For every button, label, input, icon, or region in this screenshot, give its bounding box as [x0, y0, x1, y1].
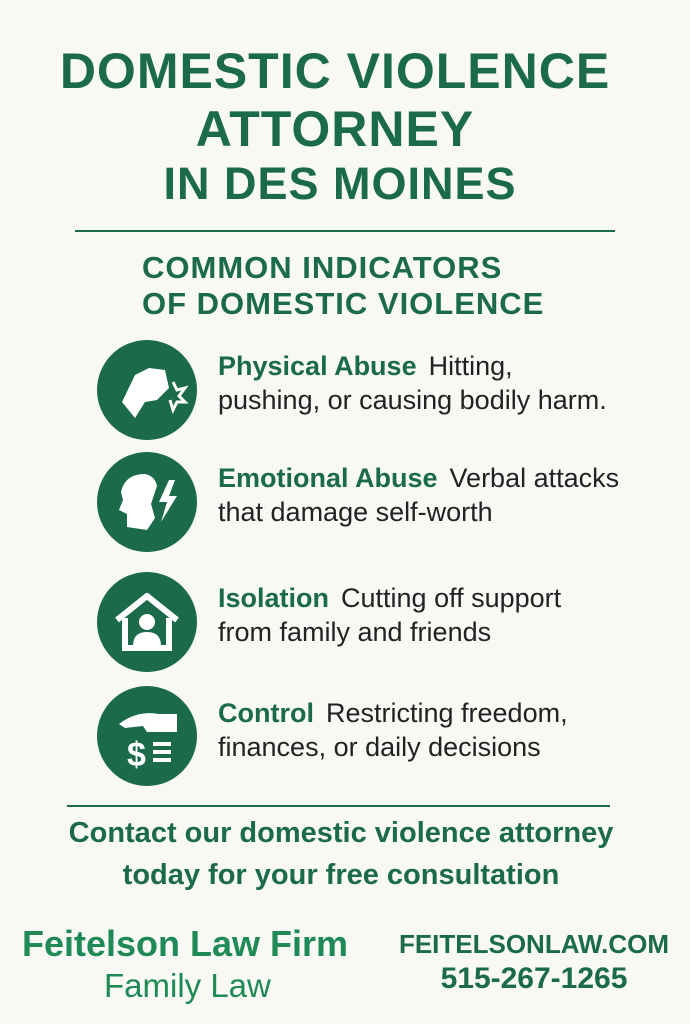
icon: hand and money: $: [127, 736, 146, 774]
text: Family Law: [104, 967, 271, 1004]
footer: contact info: FEITELSONLAW.COM: [399, 929, 669, 959]
text: emotional abuse: that damage self-worth: [218, 497, 493, 527]
call to action: [69, 817, 614, 891]
text: isolation: from family and friends: [218, 617, 491, 647]
footer: contact info: 515-267-1265: [441, 962, 627, 995]
title: DOMESTIC VIOLENCE: [60, 43, 610, 99]
title: ATTORNEY: [196, 101, 474, 157]
title: [60, 43, 610, 157]
subtitle: location: IN DES MOINES: [163, 158, 517, 209]
section heading: COMMON INDICATORS: [142, 250, 502, 285]
text: isolation: Isolation Cutting off support: [218, 583, 561, 613]
section heading: [142, 250, 544, 321]
call to action: Contact our domestic violence attorney: [69, 817, 613, 849]
text: isolation: [218, 583, 561, 647]
text: control: [218, 698, 568, 762]
icon: head with lightning: [97, 452, 197, 552]
icon: fist: [97, 340, 197, 440]
text: emotional abuse: Emotional Abuse Verbal attacks: [218, 463, 619, 493]
text: physical abuse: [218, 351, 607, 415]
text: physical abuse: pushing, or causing bodily harm.: [218, 385, 607, 415]
text: control: Control Restricting freedom,: [218, 698, 568, 728]
text: control: finances, or daily decisions: [218, 732, 541, 762]
text: physical abuse: Physical Abuse Hitting,: [218, 351, 513, 381]
icon: hand and money: [97, 686, 197, 786]
icon: house: [97, 572, 197, 672]
section heading: OF DOMESTIC VIOLENCE: [142, 286, 544, 321]
footer: contact info: [399, 929, 669, 995]
text: emotional abuse: [218, 463, 619, 527]
call to action: today for your free consultation: [123, 859, 559, 891]
footer: firm name: Feitelson Law Firm: [22, 923, 348, 964]
